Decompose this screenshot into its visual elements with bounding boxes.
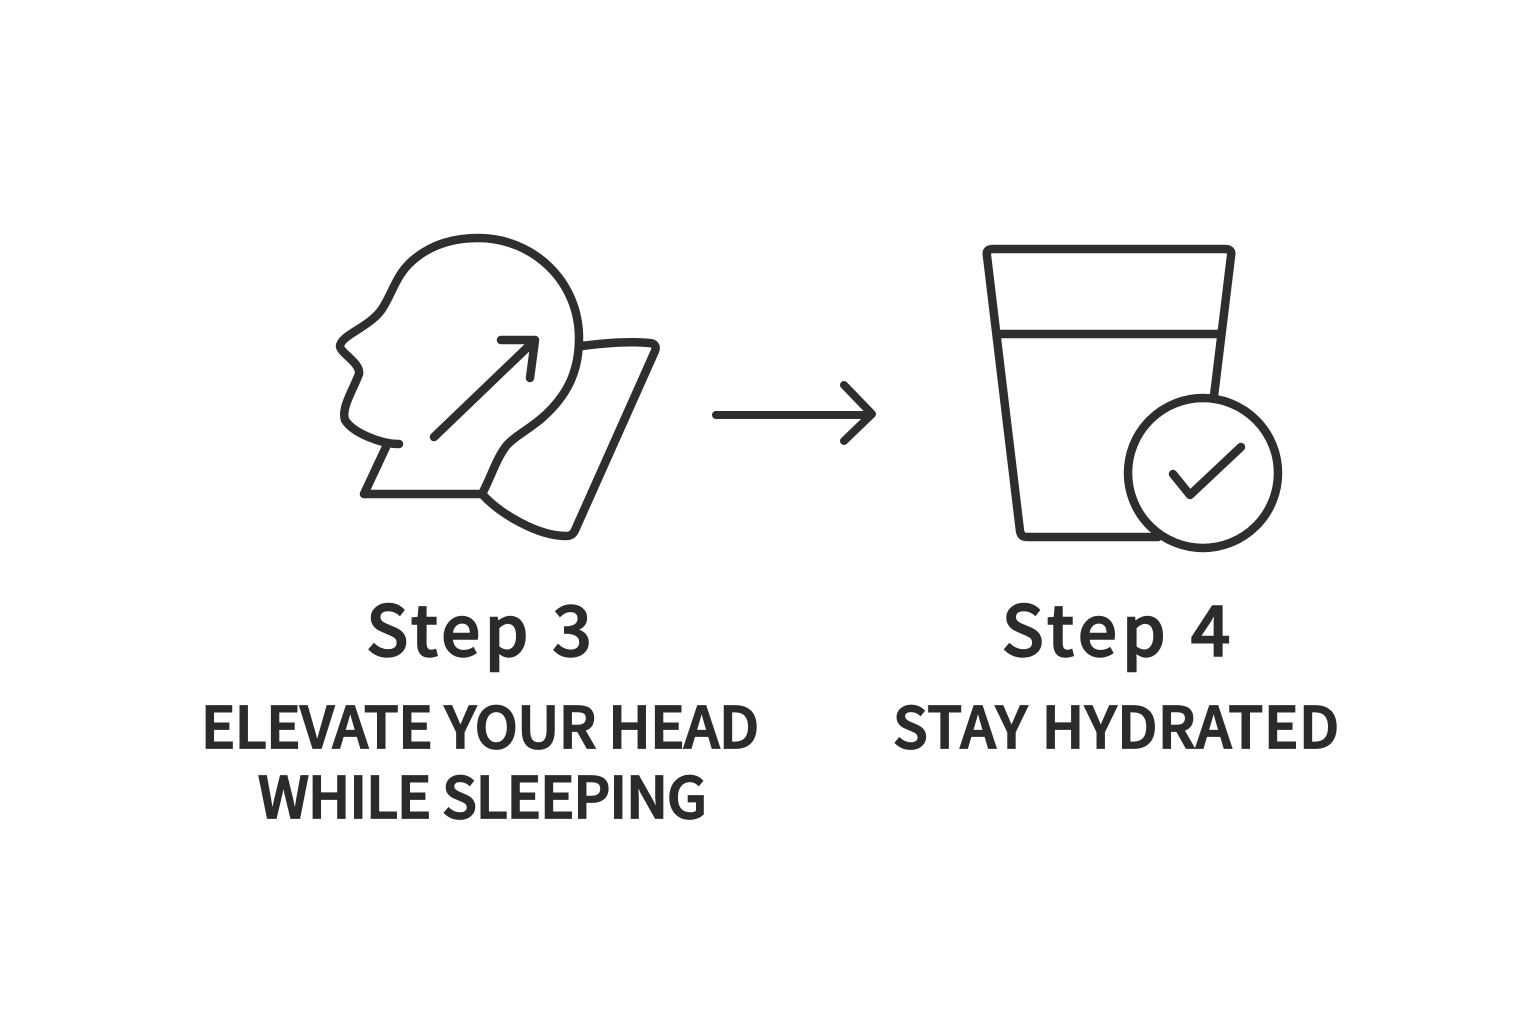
heading: step 4: Step 4 — [1002, 576, 1230, 677]
caption: step 3: ELEVATE YOUR HEAD — [201, 683, 759, 765]
caption: step 4: STAY HYDRATED — [893, 683, 1339, 765]
heading: step 3: Step 3 — [366, 576, 592, 677]
arrow — [716, 385, 872, 441]
caption: step 3: WHILE SLEEPING — [258, 753, 707, 835]
icon: head elevated on pillow — [340, 238, 656, 536]
icon: glass of water with check badge — [987, 249, 1278, 548]
caption: step 3 — [201, 683, 759, 835]
